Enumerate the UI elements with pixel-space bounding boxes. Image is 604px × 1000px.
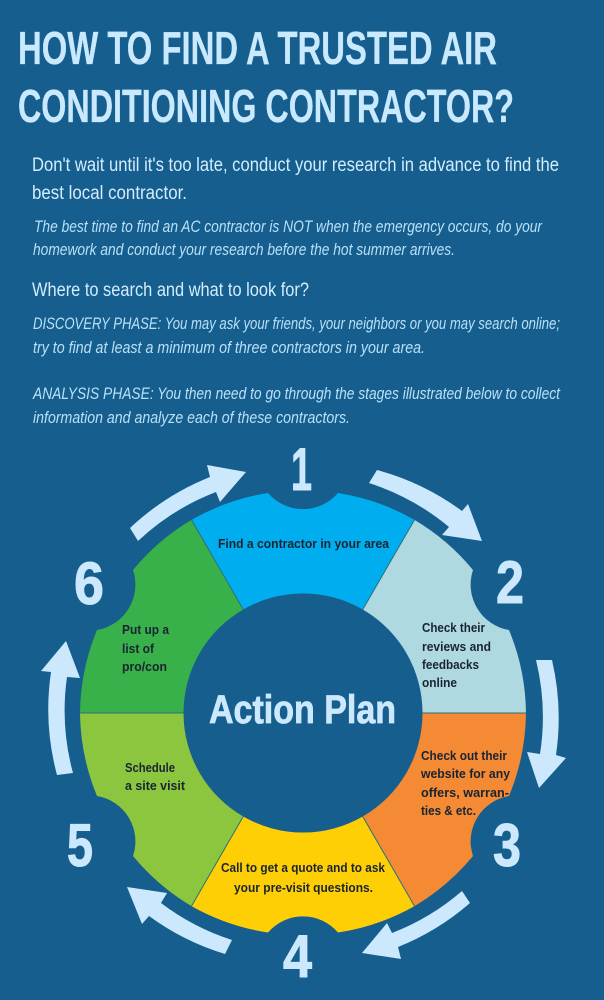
segment 1: find a contractor: Find a contractor in your area: [218, 537, 390, 551]
italic note: best time: homework and conduct your research before the hot summer arrives.: [33, 240, 455, 259]
number 2: 2: [496, 549, 524, 616]
number 5: 5: [67, 812, 93, 879]
segment 3: check website: offers, warran-: [421, 786, 509, 800]
segment 2: check reviews: [363, 520, 526, 713]
arrow 3 to 4: [362, 891, 470, 959]
intro text: [32, 155, 559, 204]
analysis phase text: information and analyze each of these contractors.: [33, 408, 350, 427]
subheading: Where to search and what to look for?: [32, 280, 309, 301]
title: [18, 22, 514, 132]
segment 6: pro and con list: pro/con: [122, 660, 167, 674]
italic note: best time: [33, 217, 543, 259]
segment 3: check website: ties & etc.: [421, 804, 476, 818]
segment 2: check reviews: Check their: [422, 621, 485, 635]
discovery phase text: [33, 314, 560, 357]
analysis phase text: [32, 384, 561, 427]
action plan wheel: [80, 493, 526, 932]
segment 1: find a contractor: [192, 493, 414, 610]
segment 4: call for a quote: Call to get a quote and to ask: [221, 861, 385, 875]
segment 4: call for a quote: [192, 816, 414, 932]
number 6: 6: [74, 550, 104, 617]
segment 2: check reviews: reviews and: [422, 640, 491, 654]
discovery phase text: try to find at least a minimum of three contractors in your area.: [33, 338, 425, 357]
segment 2: check reviews: feedbacks: [422, 658, 479, 672]
intro text: best local contractor.: [32, 183, 187, 204]
arrow 1 to 2: [369, 470, 482, 541]
segment 2: check reviews: online: [422, 676, 457, 690]
segment 5: schedule a site visit: a site visit: [125, 779, 186, 793]
arrow 5 to 6: [41, 641, 80, 775]
number 1: 1: [291, 436, 312, 503]
segment 4: call for a quote: your pre-visit questions.: [234, 881, 373, 895]
segment 6: pro and con list: [80, 520, 243, 713]
arrow 4 to 5: [127, 887, 232, 954]
number 3: 3: [493, 812, 521, 879]
segment 6: pro and con list: list of: [122, 642, 155, 656]
arrow 2 to 3: [527, 660, 566, 788]
segment 6: pro and con list: Put up a: [122, 623, 170, 637]
segment 3: check website: website for any: [420, 767, 510, 781]
arrow 6 to 1: [130, 465, 246, 541]
number 4: 4: [283, 923, 313, 990]
segment 3: check website: Check out their: [421, 749, 507, 763]
segment 5: schedule a site visit: Schedule: [125, 761, 175, 775]
segment 5: schedule a site visit: [80, 713, 243, 906]
center label: Action Plan: [209, 688, 396, 732]
segment 3: check website: [363, 713, 526, 906]
